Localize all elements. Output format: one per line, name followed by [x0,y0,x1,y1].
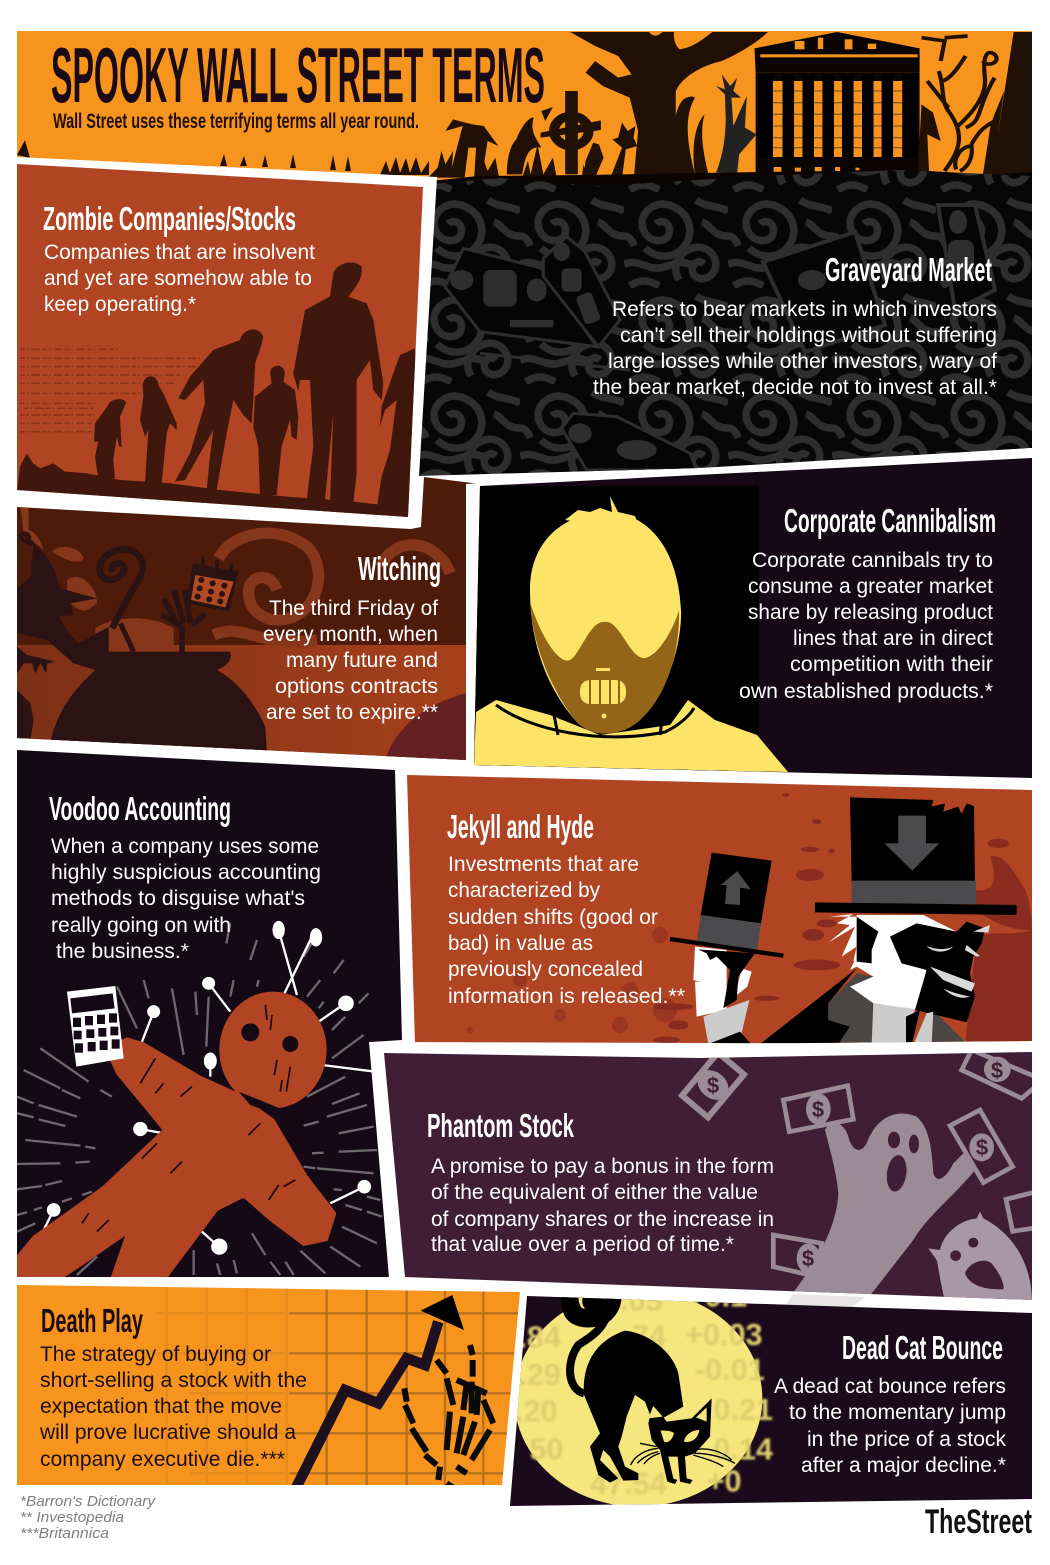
panel: phantom stock: $ [802,1246,814,1271]
illustration: moon with stock numbers: .29 [518,1358,561,1392]
description: A promise to pay a bonus in the form [431,1155,774,1178]
description: own established products.* [739,680,993,703]
description: every month, when [263,623,438,646]
description: The strategy of buying or [40,1343,271,1366]
panel: phantom stock: $ [707,1073,719,1098]
description: characterized by [448,879,600,902]
description: the bear market, decide not to invest at all.* [593,376,997,399]
illustration: moon with stock numbers: +0.03 [685,1318,763,1352]
icon: calendar [186,557,239,612]
heading: Death Play [41,1302,143,1339]
description [39,1343,307,1471]
illustration: moon with stock numbers: .84 [518,1320,561,1354]
description: of company shares or the increase in [431,1208,774,1231]
description [263,597,438,724]
description: A dead cat bounce refers [774,1375,1006,1398]
subtitle: Wall Street uses these terrifying terms all year round. [53,110,419,133]
illustration: swirling smoke [214,533,450,642]
description: in the price of a stock [807,1428,1006,1451]
description: Investments that are [448,853,639,876]
illustration: moon with stock numbers: +0.1 [687,1280,747,1314]
illustration: chart grid [290,1290,520,1487]
footnotes: sources: *Barron's Dictionary [20,1494,156,1510]
heading: Witching [358,550,441,587]
illustration: zombie silhouettes [13,262,417,523]
illustration: witch, cauldron and hand with calendar [17,543,267,753]
description: options contracts [275,675,438,698]
footnotes: sources: ** Investopedia [20,1510,124,1526]
description [739,549,993,703]
illustration: moon with stock numbers: 0.14 [713,1432,773,1466]
description: large losses while other investors, wary of [608,350,997,373]
panel: phantom stock [369,1042,1043,1307]
description [593,298,997,399]
description: and yet are somehow able to [44,267,312,290]
description: Companies that are insolvent [44,241,315,264]
description [51,835,321,963]
footnotes: sources: ***Britannica [20,1526,109,1542]
description [431,1155,774,1256]
panel: corporate cannibalism [466,448,1032,778]
description: short-selling a stock with the [40,1369,307,1392]
description: sudden shifts (good or [448,906,658,929]
description: company executive die.*** [40,1448,285,1471]
illustration: voodoo doll [17,993,335,1277]
ghost tail extending past panel [784,1294,865,1307]
description: Corporate cannibals try to [752,549,993,572]
description: that value over a period of time.* [431,1233,734,1256]
description: can't sell their holdings without suffering [620,324,997,347]
bank [754,32,920,73]
panel: phantom stock: $ [976,1135,988,1160]
heading: Voodoo Accounting [49,790,231,827]
illustration: moon with stock numbers: 0.21 [713,1393,773,1427]
description: many future and [286,649,438,672]
panel: dead cat bounce [510,1280,1032,1507]
description: consume a greater market [748,575,993,598]
illustration: moon with stock numbers: 50 [529,1432,563,1466]
illustration: masked face [474,496,788,772]
heading: Jekyll and Hyde [447,808,594,845]
illustration: black cat [561,1295,712,1484]
description: will prove lucrative should a [39,1421,296,1444]
description [774,1375,1006,1477]
description: Refers to bear markets in which investors [612,298,997,321]
panel: death play [17,1285,520,1490]
illustration: moon with stock numbers [514,1280,773,1507]
description: lines that are in direct [793,627,993,650]
illustration: Jekyll with rising hat [670,853,783,1047]
description: after a major decline.* [801,1454,1006,1477]
illustration: moon with stock numbers: 47.54 [590,1467,667,1501]
description: keep operating.* [44,293,196,316]
description: the business.* [56,940,189,963]
illustration: coffins [445,205,995,470]
illustration: moon with stock numbers: .20 [515,1395,558,1429]
description [448,853,685,1008]
description: The third Friday of [269,597,438,620]
illustration: graveyard skyline with bank [428,32,1032,195]
illustration: moon with stock numbers: -0.01 [695,1353,765,1387]
panel: witching [17,477,480,765]
description: previously concealed [448,958,643,981]
plants [584,123,637,178]
panel: jekyll and hyde [407,775,1032,1047]
cross grave [565,91,578,174]
heading: Zombie Companies/Stocks [43,200,296,237]
description: share by releasing product [748,601,993,624]
illustration: moon with stock numbers: .05 [620,1284,663,1318]
illustration: pins [44,922,375,1254]
footnotes: sources [20,1494,156,1542]
description: are set to expire.** [266,701,438,724]
heading: Phantom Stock [427,1107,574,1144]
illustration: ghosts [790,1114,975,1300]
panel: phantom stock: $ [991,1058,1003,1083]
description: to the momentary jump [789,1401,1006,1424]
left grave [445,119,498,178]
illustration: moon with stock numbers: +0 [707,1465,742,1499]
description: highly suspicious accounting [51,861,321,884]
description [44,241,315,316]
description: information is released.** [448,985,685,1008]
icons: dollar bills [773,1050,1043,1277]
description: When a company uses some [51,835,319,858]
illustration: radiating lines [17,923,382,1275]
description: really going on with [51,914,231,937]
illustration: Hyde with falling hat [757,797,1017,1047]
description: methods to disguise what's [51,887,305,910]
icon: calculator [67,986,124,1067]
tall plant [716,74,756,173]
description: expectation that the move [40,1395,282,1418]
description: bad) in value as [448,932,593,955]
panel: zombie companies [13,157,437,527]
panel: phantom stock: $ [812,1097,824,1122]
illustration: red splatter [653,793,1032,1047]
description: competition with their [790,653,993,676]
illustration: rising arrow [295,1295,464,1490]
panel: header banner [17,31,1032,200]
panel: graveyard market [418,170,1032,476]
panel: voodoo accounting [17,750,402,1277]
illustration: moon with stock numbers: .74 [623,1320,666,1354]
description: of the equivalent of either the value [431,1181,758,1204]
illustration: skeleton hand [404,1345,493,1490]
